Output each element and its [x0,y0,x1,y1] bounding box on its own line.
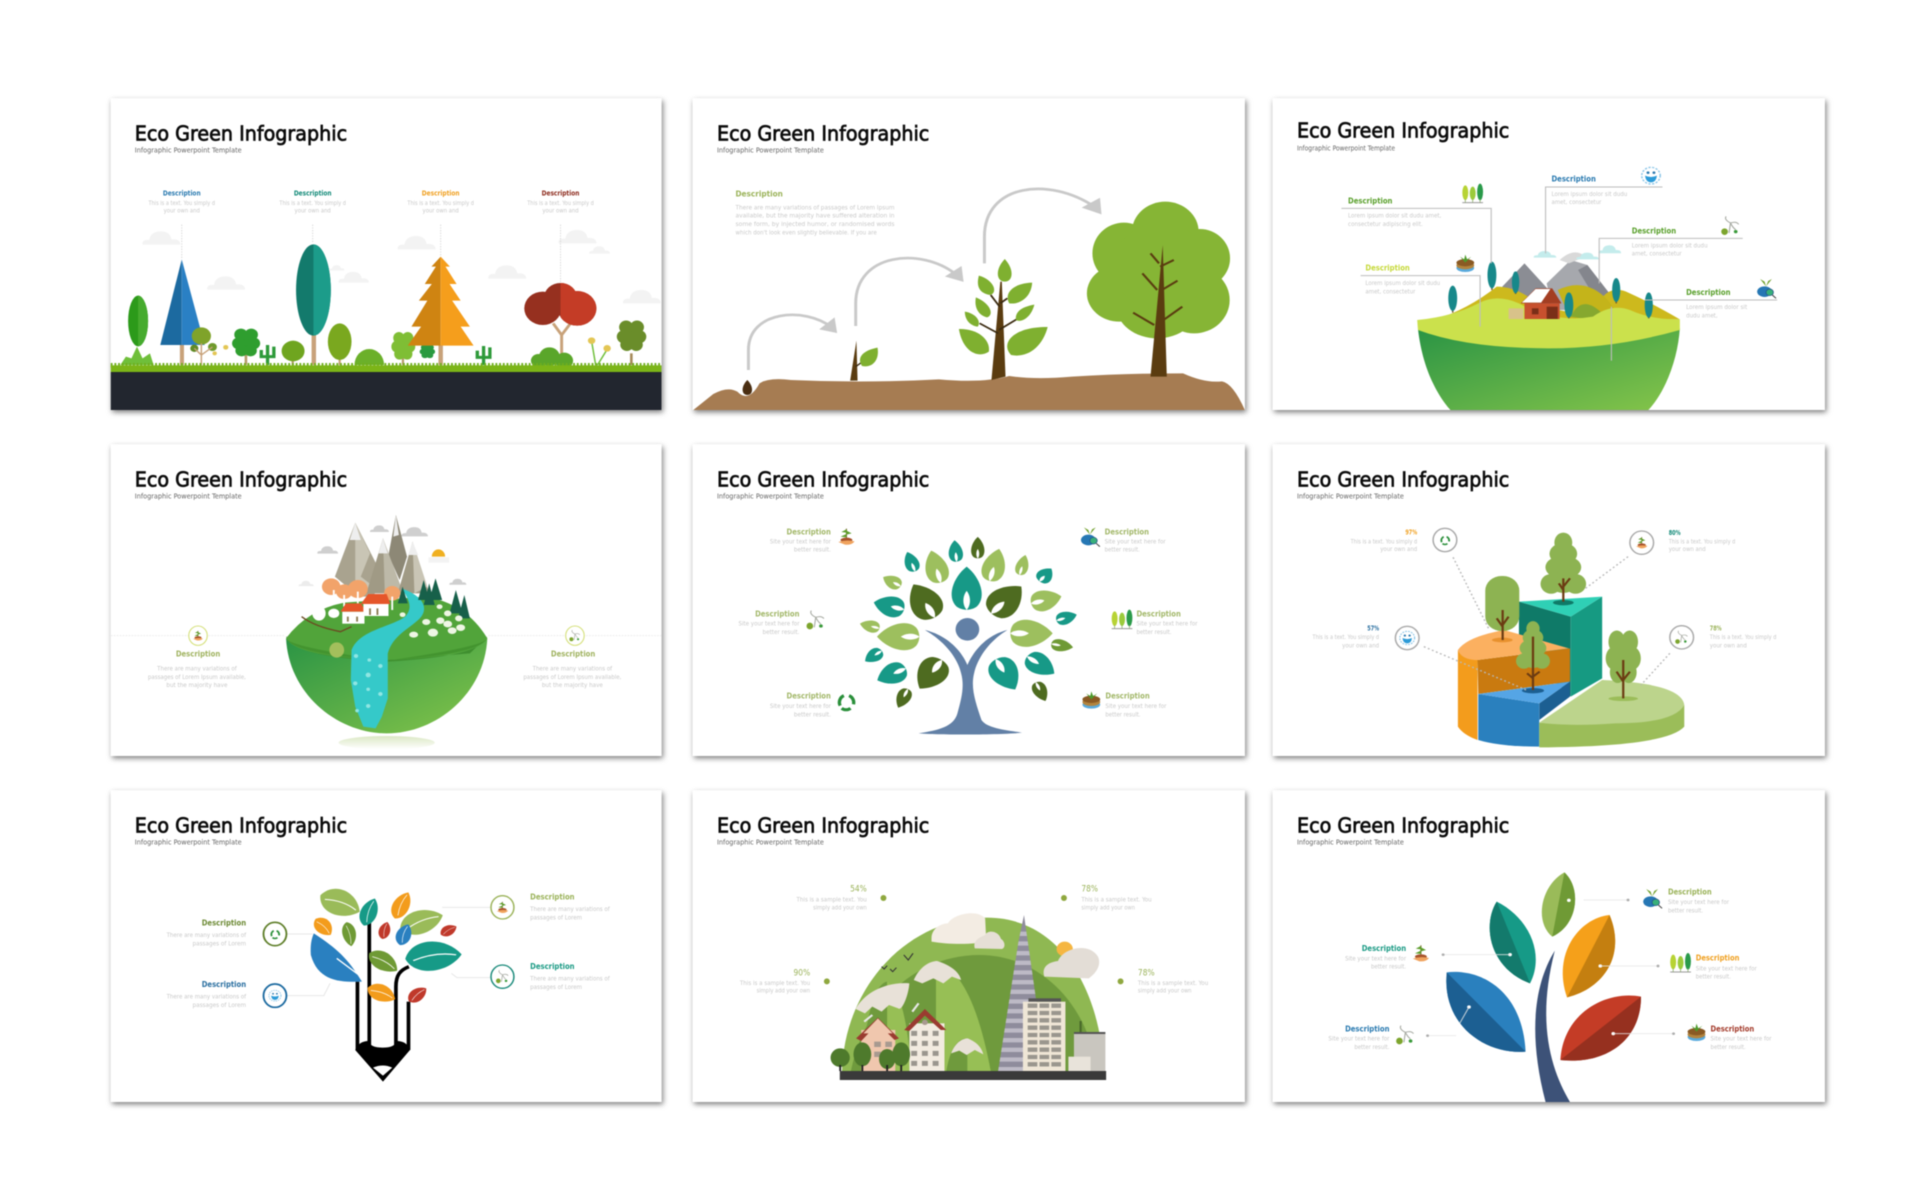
houses [856,1003,946,1071]
description labels [148,189,594,214]
callout left bottom: There are many variations of [166,994,247,1001]
item: teal: better result. [1371,964,1406,971]
callout 78%: 78% [1710,624,1722,633]
trees on chart [1485,533,1641,701]
left items: Description [787,691,831,701]
left description: There are many variations of [156,666,237,673]
left description: but the majority have [166,682,228,689]
trunk [1535,951,1570,1102]
description labels: Description [163,189,201,198]
panel: 3D pie chart [1273,444,1825,756]
subtitle: Infographic Powerpoint Template [717,838,824,846]
dotted connectors [1424,557,1670,690]
left items: better result. [762,629,799,636]
dotted leader lines [182,225,561,283]
callout 80%: This is a text. You simply d [1668,539,1735,545]
title: Eco Green Infographic [1297,119,1509,142]
item: red [1688,1024,1772,1051]
callouts: amet, consectetur [1365,289,1416,295]
callouts: amet, consectetur [1632,251,1682,257]
right description: There are many variations of [532,666,613,673]
callout 78%: your own and [1710,643,1747,649]
right items: Site your text here for [1105,703,1167,710]
stat 90%: 90% [794,968,810,978]
left items: Site your text here for [770,703,831,710]
globe body [286,638,487,733]
item: orange: Description [1696,953,1740,963]
grass strip [111,365,662,372]
right items: Site your text here for [1105,539,1166,545]
callout left top: There are many variations of [166,932,247,939]
callout right top [491,892,610,921]
item: orange: better result. [1696,974,1731,981]
subtitle: Infographic Powerpoint Template [1297,492,1404,500]
item: orange [1670,953,1757,981]
title: Eco Green Infographic [135,814,347,837]
pine trees [1448,262,1653,318]
callout 78%: This is a text. You simply d [1709,634,1776,641]
right items: better result. [1105,547,1140,554]
title: Eco Green Infographic [717,468,929,491]
callout 57%: your own and [1342,643,1379,649]
item: olive [1643,887,1729,914]
autumn trees [322,578,400,610]
callouts: Description [1686,287,1731,297]
left items: better result. [794,712,831,718]
callout 57% [1312,624,1419,650]
left items: Site your text here for [770,539,831,545]
teal leaf [1490,902,1536,983]
description labels: This is a text. You simply d [148,200,215,207]
subtitle: Infographic Powerpoint Template [717,492,824,500]
callouts [1341,174,1777,361]
left items [738,527,855,718]
callout 97% [1350,528,1457,553]
description block: which don't look even slightly believable. If you are [735,230,877,236]
callout 97%: 97% [1405,528,1417,537]
callouts: amet, consectetur [1551,199,1602,206]
callout right top: Description [530,892,575,901]
item: blue: better result. [1354,1044,1389,1051]
right items: Description [1136,609,1181,619]
callouts: dudu amet, [1686,313,1718,319]
hills with snow caps [856,961,991,1071]
stat 54%: This is a sample text. You [796,897,867,904]
right items: Description [1105,527,1149,536]
panel: floating island [111,444,662,756]
right description: Description [551,649,596,659]
dark pines [398,578,470,618]
item: olive: better result. [1668,908,1703,914]
right items: Site your text here for [1136,621,1198,628]
blue slice [1478,682,1570,747]
item: orange: Site your text here for [1696,966,1757,972]
left description: Description [176,649,220,659]
inner dome [851,955,1097,1071]
houses [340,594,390,624]
item: blue: Site your text here for [1328,1036,1390,1043]
river and waterfall [351,588,424,728]
callout icons [1456,167,1776,298]
teal slice [1519,597,1602,697]
left items: Description [787,527,831,536]
item: blue: Description [1345,1024,1390,1034]
road [840,1071,1106,1080]
callout right top: passages of Lorem [530,915,582,921]
orange leaf [1563,915,1615,997]
callout left top: passages of Lorem [192,941,246,947]
stat 78% top right: This is a sample text. You [1080,897,1152,904]
olive leaf [1542,872,1575,937]
panel: human tree [693,444,1245,756]
callouts: Lorem ipsum dolor sit dudu [1632,243,1708,249]
title: Eco Green Infographic [717,122,929,145]
description labels: your own and [423,208,459,214]
globe top [286,597,487,662]
callout right top: There are many variations of [529,906,610,913]
right description: passages of Lorem Ipsum available, [523,674,621,681]
mature tree [1087,202,1230,377]
right items: better result. [1136,629,1172,636]
background clouds [142,230,661,303]
sheep [400,604,465,638]
olive dot [329,642,344,658]
title: Eco Green Infographic [717,814,929,837]
callout left bottom: Description [202,979,246,989]
callout 80% [1630,528,1735,554]
description labels: your own and [542,208,579,214]
young tree [959,259,1048,380]
tower [998,916,1036,1072]
bowl body [1418,328,1680,410]
callout right bottom: Description [530,961,575,971]
callout right bottom [491,961,610,991]
clouds and sun [932,913,1099,978]
callouts: Description [1632,226,1676,235]
birds [882,953,913,972]
left description [148,626,246,689]
description labels: This is a text. You simply d [407,200,474,207]
dark ground band [111,372,662,410]
description block [735,189,895,236]
description labels: your own and [164,208,200,214]
tree figure [919,618,1022,735]
callout right bottom: There are many variations of [529,976,610,983]
panel: pencil tree [111,790,662,1102]
callout 57%: 57% [1367,624,1379,633]
panel: tree varieties [111,98,662,410]
sprout [850,341,878,381]
stat 90%: This is a sample text. You [739,980,810,987]
callouts: consectetur adipiscing elit. [1348,221,1423,228]
small building [1068,1021,1105,1071]
clouds and sun [299,525,466,586]
callouts: Lorem ipsum dolor sit dudu [1365,280,1440,287]
right items: Description [1105,691,1150,701]
item: olive: Site your text here for [1668,899,1729,906]
description block: available, but the majority have suffered alteration in [735,213,895,220]
right description [523,626,621,689]
blue leaf [1446,972,1526,1052]
left items: Site your text here for [738,621,800,628]
stat 78% bottom right: This is a sample text. You [1137,980,1208,987]
title: Eco Green Infographic [135,122,347,145]
callouts: Lorem ipsum dolor sit dudu amet, [1348,213,1441,220]
description labels: Description [422,189,460,198]
stat 54%: 54% [850,884,867,895]
description labels: your own and [295,208,331,214]
left items: better result. [794,547,831,554]
stat 78% bottom right [1118,968,1208,995]
stat 78% top right: 78% [1081,884,1098,895]
callout left top: Description [202,918,246,927]
item: red: better result. [1711,1044,1746,1051]
callout 78% [1670,624,1776,649]
stat 54%: simply add your own [813,905,867,911]
trees [831,1042,910,1071]
description labels: This is a text. You simply d [526,200,594,207]
leaves [310,883,463,1006]
subtitle: Infographic Powerpoint Template [1297,838,1404,846]
panel: eco city dome [693,790,1245,1102]
stat 78% top right [1061,884,1152,911]
green slice [1539,680,1684,747]
office building [1023,998,1065,1071]
growth arrows [748,189,1100,370]
right description: but the majority have [542,682,603,689]
stat 78% bottom right: simply add your own [1138,988,1192,995]
pencil [355,910,410,1082]
item: teal: Description [1362,943,1406,953]
connector lines [287,907,490,996]
panel: five leaf tree [1273,790,1825,1102]
callouts: Description [1365,263,1410,273]
subtitle: Infographic Powerpoint Template [1297,144,1395,153]
reflection [339,736,435,749]
stat 90% [739,968,830,995]
subtitle: Infographic Powerpoint Template [135,492,242,500]
callout right bottom: passages of Lorem [530,984,582,991]
callout 97%: your own and [1380,546,1417,553]
callout left bottom [166,979,286,1009]
trees and shrubs [120,244,646,369]
left description: passages of Lorem Ipsum available, [148,674,246,681]
callout left bottom: passages of Lorem [192,1002,246,1009]
description block: Description [735,189,783,199]
soil [693,373,1245,410]
stat 54% [796,884,886,911]
title: Eco Green Infographic [1297,468,1509,491]
leader lines [1426,899,1675,1037]
callout 80%: 80% [1669,528,1681,537]
panel: landscape bowl [1273,98,1825,410]
leaves [858,537,1079,710]
item: teal: Site your text here for [1345,956,1406,962]
subtitle: Infographic Powerpoint Template [135,838,242,846]
item: red: Site your text here for [1711,1036,1772,1043]
callout 57%: This is a text. You simply d [1312,634,1379,641]
mountains [335,515,429,597]
right items: better result. [1105,712,1141,718]
callouts: Description [1551,174,1596,184]
orange slice [1458,630,1570,740]
item: teal [1345,943,1429,971]
house [1509,288,1561,319]
panel: growth stages [693,98,1245,410]
hills [1417,285,1680,348]
callouts: Lorem ipsum dolor sit [1686,304,1748,311]
stat 78% bottom right: 78% [1138,968,1155,978]
item: red: Description [1711,1024,1754,1034]
left items: Description [755,609,800,619]
red leaf [1560,995,1641,1061]
description labels: Description [294,189,332,198]
description block: some form, by injected humor, or randomised words [735,221,895,228]
cows and fence [302,606,352,632]
callouts: Lorem ipsum dolor sit dudu [1551,191,1627,198]
subtitle: Infographic Powerpoint Template [717,146,824,154]
callout 97%: This is a text. You simply d [1350,539,1417,545]
title: Eco Green Infographic [135,468,347,491]
subtitle: Infographic Powerpoint Template [135,146,242,154]
description labels: This is a text. You simply d [279,200,346,207]
mountains and clouds [1502,245,1621,310]
stat 78% top right: simply add your own [1081,905,1135,911]
callout left top [166,918,286,947]
water droplets [353,654,383,712]
callouts: Description [1348,196,1393,206]
item: olive: Description [1668,887,1712,896]
right items [1081,527,1198,718]
callout 80%: your own and [1669,546,1706,553]
title: Eco Green Infographic [1297,814,1509,837]
description block: There are many variations of passages of Lorem Ipsum [735,205,895,211]
seed [743,380,752,395]
dome [842,918,1104,1071]
description labels: Description [542,189,579,198]
stat 90%: simply add your own [757,988,810,995]
item: blue [1328,1024,1414,1051]
